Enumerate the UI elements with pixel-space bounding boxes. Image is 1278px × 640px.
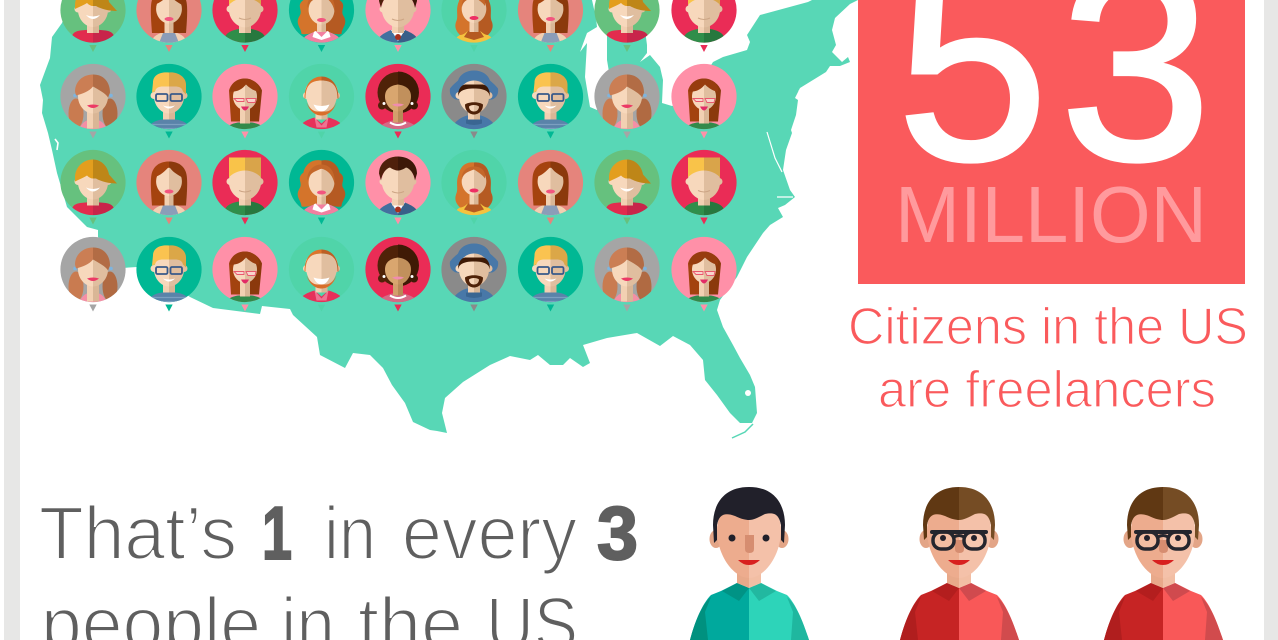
caption: citizens are freelancers: are freelancers	[878, 361, 1216, 419]
avatar grid: row 1	[60, 0, 737, 52]
heading: 1 in every 3 people	[39, 491, 638, 640]
left side band	[4, 0, 20, 640]
person: teal shirt, dark hair	[690, 487, 809, 640]
stat unit: MILLION	[895, 170, 1207, 259]
heading: 1 in every 3 people: That’s	[39, 491, 237, 575]
map of the United States	[40, 0, 858, 438]
avatar grid: row 4	[60, 237, 737, 312]
heading: 1 in every 3 people: 3	[597, 491, 638, 575]
caption: citizens are freelancers: Citizens in the US	[848, 298, 1248, 356]
person: red shirt, glasses (right)	[1104, 487, 1223, 640]
heading: 1 in every 3 people: in	[324, 491, 376, 575]
heading: 1 in every 3 people: 1	[262, 491, 292, 575]
person: red shirt, glasses (left)	[900, 487, 1019, 640]
avatar grid: row 2	[60, 64, 737, 138]
right side band	[1264, 0, 1278, 640]
avatar grid: row 3	[60, 150, 737, 224]
caption: citizens are freelancers	[848, 298, 1248, 419]
panel: 53 million stat box	[858, 0, 1245, 284]
heading: 1 in every 3 people: every	[402, 491, 577, 575]
